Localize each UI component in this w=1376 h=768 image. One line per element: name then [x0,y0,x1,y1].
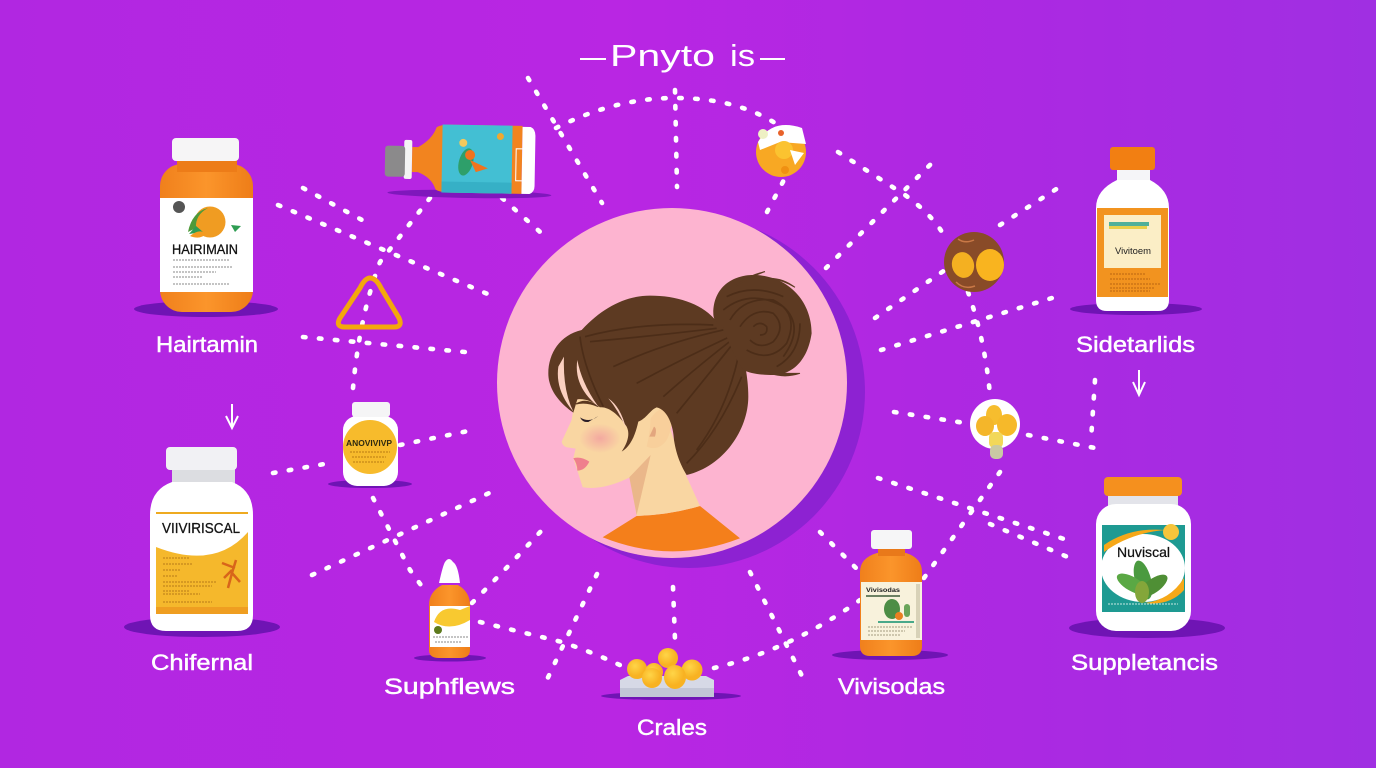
label: Chifernal: Chifernal [151,650,253,675]
bottle: Viviriscal [124,447,280,637]
label: HAIRIMAIN [172,241,238,257]
label: Vivisodas: Vivisodas [838,674,945,699]
bottle: top tilted [384,124,553,199]
icon: food cluster [756,125,806,177]
label: Sidetarlids: Sidetarlids [1076,332,1195,357]
label: Suphflews: Suphflews [384,674,515,699]
bottle: small round: ANOVIVIVP [346,439,393,448]
label: Nuviscal [1117,544,1170,560]
label [1104,215,1161,291]
label [1101,524,1185,612]
label: Crales: Crales [637,715,707,740]
arrow: left down [226,404,238,428]
label: VIIVIRISCAL [162,521,240,537]
bottle: Vivisodas [832,530,948,660]
title [580,38,785,73]
arrow: right down [1133,370,1145,395]
icon: yellow petals [970,399,1020,459]
portrait drop shadow [513,216,865,568]
label [156,512,248,614]
title: Pnyto [610,38,715,73]
label: Suppletancis: Suppletancis [1071,650,1218,675]
pink disc [497,208,847,558]
bottle: Nuviscal [1069,477,1225,638]
label [160,198,253,292]
bottle: Hairimain [134,138,278,317]
icon: brown nut [944,232,1004,292]
bottle: dropper [414,559,486,662]
label [430,606,470,647]
spinach leaf [1114,559,1171,603]
fruit cluster [455,139,488,178]
tray of capsules [601,648,741,700]
bottle: small round [328,402,412,488]
title: is [730,38,755,73]
central portrait [497,208,865,568]
bottle: Vivitoem [1070,147,1202,315]
dotted connector network [273,78,1095,688]
warning triangle [338,278,400,327]
woman profile [548,272,812,551]
label: Hairtamin: Hairtamin [156,332,258,357]
label: Vivitoem [1115,246,1151,257]
label: Vivisodas [866,588,901,594]
